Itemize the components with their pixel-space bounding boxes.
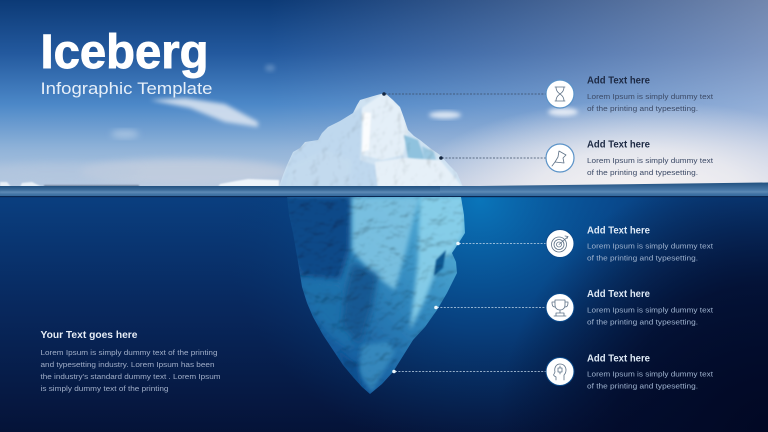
text block: your text goes here: and typesetting industry. Lorem Ipsum has been xyxy=(40,360,215,369)
callout 5: head xyxy=(392,354,714,390)
icon: head xyxy=(554,364,566,380)
callout 4: trophy xyxy=(434,289,714,326)
callout 5: head: Add Text here xyxy=(587,354,650,364)
ice facets xyxy=(279,107,378,187)
background: deep sea xyxy=(0,196,768,432)
shadow side and shading xyxy=(280,195,352,280)
callout 2: pin xyxy=(439,140,714,177)
icon: target xyxy=(552,236,568,252)
subtitle: Infographic Template xyxy=(40,79,212,98)
callout 1: hourglass xyxy=(382,76,714,113)
callout 4: trophy: Lorem Ipsum is simply dummy text xyxy=(587,306,714,314)
callout 4: trophy: of the printing and typesetting. xyxy=(587,318,698,326)
water surface band xyxy=(0,182,768,197)
icon: hourglass xyxy=(555,87,565,101)
callout 3: target xyxy=(456,226,714,262)
icon: trophy xyxy=(552,300,568,316)
callout 3: target: Add Text here xyxy=(587,226,650,236)
background: sky xyxy=(0,0,768,190)
callout 3: target: of the printing and typesetting. xyxy=(587,254,698,262)
callout 1: hourglass: Add Text here xyxy=(587,76,650,86)
title: Iceberg xyxy=(40,26,208,79)
callout 4: trophy: Add Text here xyxy=(587,289,650,300)
callout 2: pin: Lorem Ipsum is simply dummy text xyxy=(587,156,714,165)
iceberg below water xyxy=(280,195,470,397)
callout 1: hourglass: of the printing and typesetting. xyxy=(587,104,698,113)
callout 2: pin: of the printing and typesetting. xyxy=(587,168,698,177)
text block: your text goes here: Lorem Ipsum is simply dummy text of the printing xyxy=(40,348,218,357)
text block: your text goes here: is simply dummy text of the printing xyxy=(40,384,168,393)
distant icebergs on the horizon xyxy=(0,179,279,187)
callout 5: head: of the printing and typesetting. xyxy=(587,382,698,390)
callout 5: head: Lorem Ipsum is simply dummy text xyxy=(587,370,714,378)
callout 3: target: Lorem Ipsum is simply dummy text xyxy=(587,242,714,250)
text block: your text goes here: Your Text goes here xyxy=(40,329,138,341)
text block: your text goes here: the industry's standard dummy text . Lorem Ipsum xyxy=(40,372,221,381)
callout 1: hourglass: Lorem Ipsum is simply dummy text xyxy=(587,92,714,101)
icon: push pin xyxy=(552,151,566,166)
iceberg above water xyxy=(280,94,462,186)
text block: your text goes here xyxy=(40,329,221,393)
callout 2: pin: Add Text here xyxy=(587,140,650,150)
